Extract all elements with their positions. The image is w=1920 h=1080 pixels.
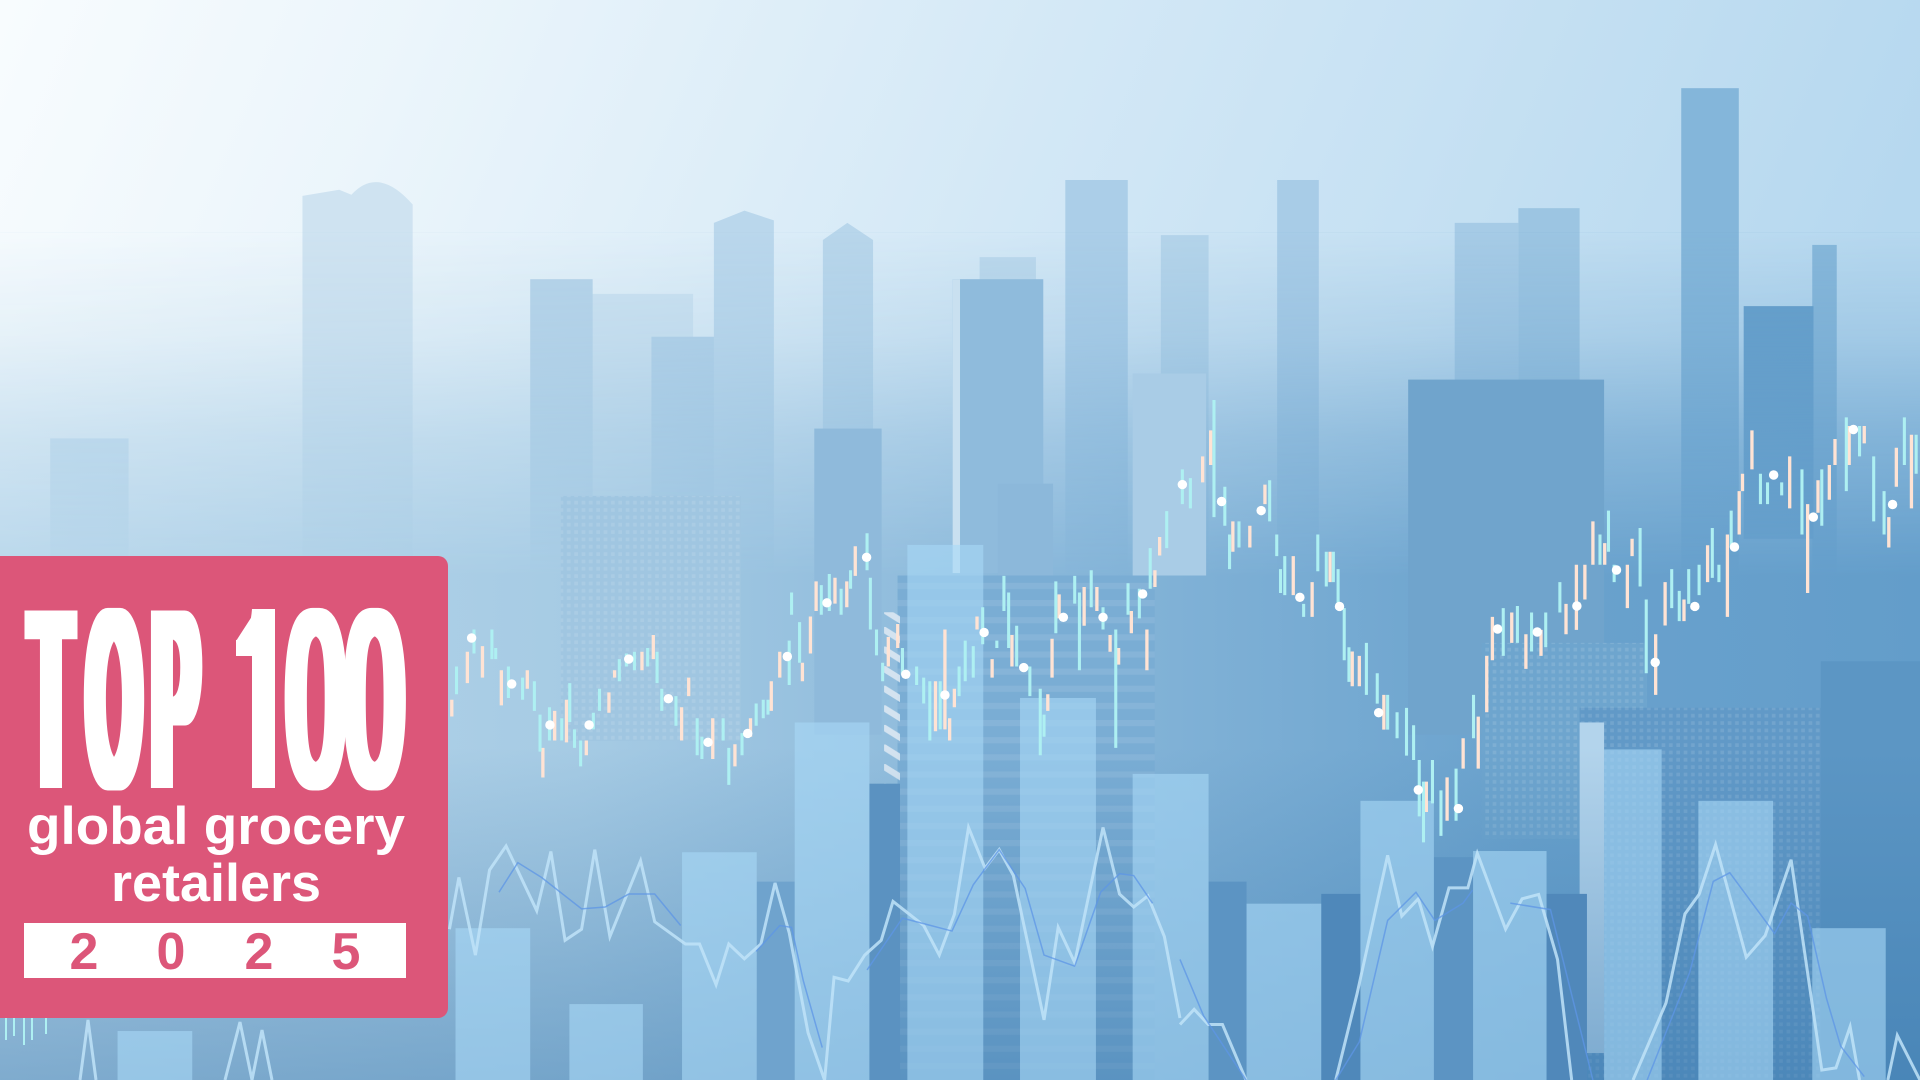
- heading: 1: 1: [233, 555, 293, 843]
- subheading: retailers: retailers: [111, 854, 321, 913]
- candles below badge: [6, 1018, 46, 1045]
- city haze mass: [0, 233, 1920, 1080]
- candles left section: [452, 511, 1167, 785]
- badge background: [0, 556, 448, 1018]
- badge: Top 100 global grocery retailers 2025: [0, 554, 448, 1018]
- heading: TOP: TOP: [30, 556, 199, 844]
- heading: 00: 00: [283, 554, 408, 843]
- year: 2025: 2025: [70, 923, 360, 981]
- mid towers: [561, 279, 1920, 1080]
- far towers: [50, 88, 1837, 637]
- candlestick chart: [6, 400, 1916, 1045]
- subheading: global grocery: global grocery: [27, 797, 406, 856]
- bottom shading and dark gaps: [0, 747, 1920, 1080]
- translucent bar chart columns: [118, 545, 1886, 1080]
- candles right section: [1178, 400, 1916, 842]
- year bar: [24, 923, 406, 978]
- blue line chart: [499, 850, 1864, 1080]
- light line chart: [80, 827, 1920, 1080]
